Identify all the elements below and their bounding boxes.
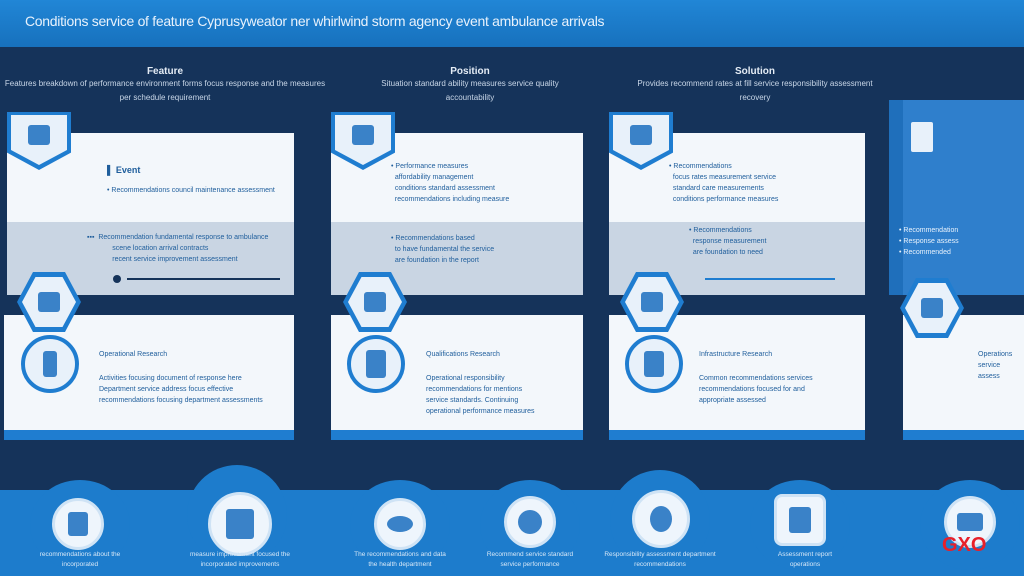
column 3 heading: recovery (740, 93, 770, 102)
panel: card 1 lower: Operational Research (99, 351, 167, 358)
bottom icons row (40, 465, 1002, 568)
panel: card 3 lower: recommendations focused for and (699, 386, 805, 393)
panel: card 3 upper: • Recommendations (689, 227, 752, 234)
column 1 heading: per schedule requirement (120, 93, 210, 102)
panel: card 4 upper (partial): • Recommendation (899, 227, 958, 234)
bottom icons row: operations (790, 561, 820, 568)
panel: card 1 lower: Activities focusing document of response here (99, 375, 242, 382)
panel: card 4 upper (partial): • Recommended (899, 249, 951, 256)
panel: card 3 upper: • Recommendations (669, 163, 732, 170)
icon: card 3 hex tab (609, 112, 673, 170)
icon: card 1 hex tab (7, 112, 71, 170)
panel: card 1 upper: ▪▪▪ Recommendation fundamental response to ambulance (87, 234, 268, 241)
column 2 heading: Situation standard ability measures service quality (381, 79, 559, 88)
bottom icons row: Recommend service standard (487, 551, 573, 558)
bottom icons row: incorporated (62, 561, 98, 568)
bottom icons row: recommendations (634, 561, 686, 568)
panel: card 3 upper: focus rates measurement service (673, 174, 776, 181)
panel: card 1 upper: ▌ Event (107, 165, 140, 175)
panel: card 2 lower: operational performance measures (426, 408, 535, 415)
icon: card 2 hex tab (331, 112, 395, 170)
panel: card 2 upper: conditions standard assessment (395, 185, 495, 192)
bottom icons row: incorporated improvements (201, 561, 279, 568)
panel: card 1 upper: • Recommendations council maintenance assessment (107, 187, 275, 194)
panel: card 4 lower (903, 315, 1024, 440)
column 3 heading: Solution (735, 66, 775, 77)
column 1 heading: Features breakdown of performance environment forms focus response and the measures (5, 79, 325, 88)
column 2 heading: accountability (446, 93, 494, 102)
header bar (0, 0, 1024, 47)
panel: card 1 upper (7, 133, 294, 295)
panel: card 1 upper: scene location arrival contracts (112, 245, 208, 252)
bottom icons row: the health department (368, 561, 432, 568)
panel: card 2 upper: • Performance measures (391, 163, 468, 170)
panel: card 4 lower: service (978, 362, 1000, 369)
bottom icons row: The recommendations and data (354, 551, 446, 558)
column 2 heading: Position (450, 66, 490, 77)
column 1 heading (5, 66, 325, 102)
bottom icons row: GXO (942, 534, 986, 556)
panel: card 2 upper (331, 133, 583, 295)
panel: card 2 lower: Operational responsibility (426, 375, 505, 382)
panel: card 3 lower: Common recommendations services (699, 375, 813, 382)
panel: card 2 upper: • Recommendations based (391, 235, 475, 242)
icons: hex badges (17, 272, 81, 332)
panel: card 2 lower: service standards. Continuing (426, 397, 518, 404)
panel: card 3 lower (609, 315, 865, 440)
column 1 heading: Feature (147, 66, 183, 77)
panel: card 4 lower: Operations (978, 351, 1012, 358)
panel: card 1 lower: recommendations focusing department assessments (99, 397, 263, 404)
column 3 heading: Provides recommend rates at fill service responsibility assessment (637, 79, 873, 88)
panel: card 2 lower: Qualifications Research (426, 351, 500, 358)
bottom icons row: measure improvement focused the (190, 551, 290, 558)
panel: card 2 lower (331, 315, 583, 440)
panel: card 2 upper: to have fundamental the service (395, 246, 494, 253)
bottom icons row: Responsibility assessment department (604, 551, 716, 558)
panel: card 2 upper: are foundation in the report (395, 257, 479, 264)
bottom band (0, 490, 1024, 576)
panel: card 2 upper: recommendations including measure (395, 196, 509, 203)
panel: card 3 lower: appropriate assessed (699, 397, 766, 404)
column 3 heading (637, 66, 873, 102)
panel: card 1 lower: Department service address focus effective (99, 386, 233, 393)
title: Conditions service of feature Cyprusyweator ner whirlwind storm agency event ambulance arrivals (25, 13, 604, 29)
panel: card 3 upper: are foundation to need (693, 249, 763, 256)
panel: card 4 upper (partial) (889, 100, 1024, 295)
bottom icons row: service performance (501, 561, 559, 568)
panel: card 2 lower: recommendations for mentions (426, 386, 522, 393)
bottom icons row: Assessment report (778, 551, 832, 558)
bottom icons row: recommendations about the (40, 551, 120, 558)
panel: card 3 lower: Infrastructure Research (699, 351, 772, 358)
panel: card 3 upper: standard care measurements (673, 185, 764, 192)
column 2 heading (381, 66, 559, 102)
panel: card 3 upper: response measurement (693, 238, 766, 245)
panel: card 4 upper (partial): • Response assess (899, 238, 959, 245)
panel: card 1 lower (4, 315, 294, 440)
panel: card 4 lower: assess (978, 373, 1000, 380)
panel: card 3 upper: conditions performance measures (673, 196, 778, 203)
panel: card 1 upper: recent service improvement assessment (112, 256, 238, 263)
panel: card 3 upper (609, 133, 865, 295)
panel: card 2 upper: affordability management (395, 174, 473, 181)
